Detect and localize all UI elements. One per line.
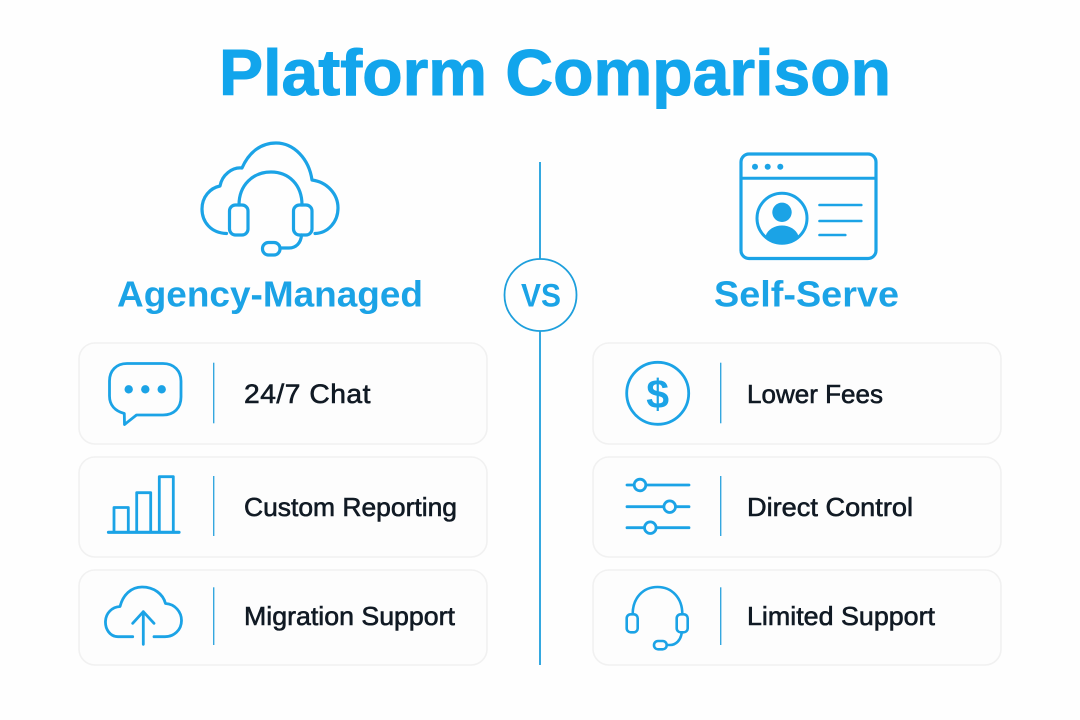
heading: self-serve: Self-Serve — [714, 274, 899, 314]
title: Platform Comparison — [219, 36, 891, 109]
icon: dollar coin: $ — [646, 371, 669, 417]
heading: agency-managed: Agency-Managed — [117, 274, 423, 314]
row: direct control — [593, 457, 1001, 557]
row: 24/7 chat: 24/7 Chat — [244, 379, 371, 409]
panel: self-serve — [593, 154, 1001, 665]
row: custom reporting: Custom Reporting — [244, 492, 457, 522]
row: migration support: Migration Support — [244, 601, 456, 631]
row: custom reporting — [79, 457, 487, 557]
icon: browser profile window — [741, 154, 876, 258]
row: limited support: Limited Support — [747, 601, 936, 631]
row: migration support — [79, 570, 487, 665]
icon: headset — [627, 587, 688, 649]
icon: dollar coin — [627, 362, 689, 424]
center divider with VS badge — [504, 162, 576, 665]
icon: chat bubble — [110, 364, 181, 424]
row: direct control: Direct Control — [747, 492, 913, 522]
row: lower fees: Lower Fees — [747, 379, 883, 409]
row: 24/7 chat — [79, 343, 487, 444]
icon: cloud upload — [105, 587, 182, 644]
row: lower fees — [593, 343, 1001, 444]
center divider with VS badge: VS — [521, 278, 561, 314]
icon: cloud with headset — [202, 143, 338, 255]
icon: sliders — [627, 479, 689, 534]
row: limited support — [593, 570, 1001, 665]
panel: agency-managed — [79, 143, 487, 665]
icon: bar chart — [108, 477, 179, 532]
